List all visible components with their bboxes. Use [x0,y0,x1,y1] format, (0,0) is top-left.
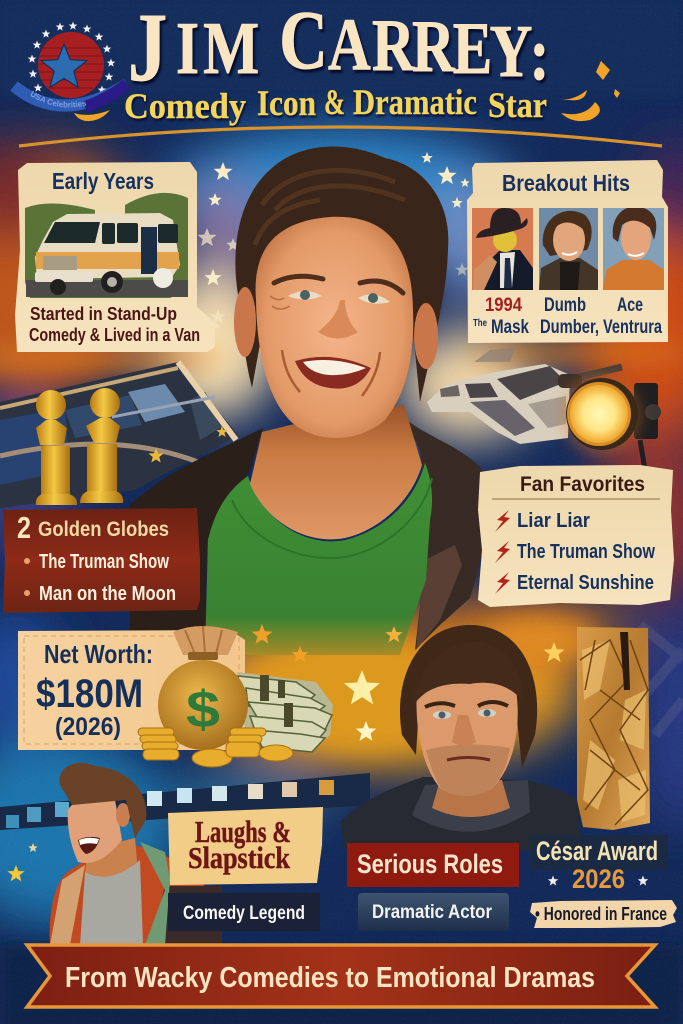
hair [400,625,537,768]
nose [452,715,476,746]
panel: golden globes: Golden Globes [38,518,169,541]
title arc [19,127,662,146]
mouth [282,350,380,396]
panel: early years [15,162,220,352]
panel: golden globes [3,508,200,613]
award year: 2026 [572,864,625,894]
net worth figures: (2026) [55,713,121,741]
award films: The Truman Show [39,551,169,573]
subtitle: Dramatic [353,82,477,122]
portrait: dramatic character [340,625,582,850]
title: M [203,8,259,90]
label: serious roles [347,843,519,887]
floral shirt [50,840,205,945]
film labels: Ace [617,295,643,316]
van illustration [25,193,188,298]
neck [250,405,422,539]
award films: Man on the Moon [39,583,176,605]
subtitle: Star [488,85,547,125]
filmstrip backdrop [0,362,238,508]
title: R [412,6,455,88]
film labels: Ventrura [603,317,662,338]
film labels: Dumb [544,295,586,316]
main portrait: smiling Jim Carrey [130,147,488,655]
film labels: The [473,318,487,329]
césar award block [530,835,677,928]
green shirt [205,463,432,655]
hair [235,147,448,402]
panel: laughs and slapstick: Slapstick [188,840,291,875]
film labels [473,295,662,338]
ears [234,287,438,369]
photo: ace ventura [603,206,664,290]
statuette 2 [80,388,123,503]
banner [27,945,655,1007]
subtitle: Icon [257,83,316,123]
favourites list: Liar Liar [517,510,590,532]
title: E [453,8,492,90]
face [256,217,413,438]
icon: money bag [158,626,248,750]
award count: 2 [17,510,31,545]
portrait: comedy character [50,763,222,945]
label: comedy legend: Comedy Legend [183,903,305,924]
eyes [288,290,390,304]
label: comedy legend [168,893,320,931]
icon: money stack [237,672,333,752]
photo: the mask [472,208,533,290]
film labels: Dumber, [540,317,599,338]
award films [24,551,176,605]
title sparkles [74,61,620,121]
subtitle: Comedy [124,86,246,126]
neck [85,838,137,877]
face [416,668,518,796]
label: dramatic actor [358,893,509,931]
label: dramatic actor: Dramatic Actor [372,902,493,923]
net worth figures [36,639,153,741]
hair highlights [255,170,405,245]
face [68,799,122,863]
jacket [340,777,582,850]
statuette 1 [36,390,77,505]
eye wrinkles [270,296,290,309]
honored in france tag [530,900,677,928]
favourites list: Eternal Sunshine [517,572,654,594]
panel: breakout hits [467,160,668,343]
golden globe statuettes [36,388,123,505]
subtitle [124,82,547,126]
brows [425,702,508,707]
vehicle: time car [427,348,570,444]
subtitle: & [324,82,345,122]
title: : [530,14,549,96]
heading: Fan Favorites [520,473,645,496]
net worth figures: Net Worth: [44,639,153,669]
tee [412,780,530,832]
césar statuette [577,627,650,830]
caption: Started in Stand-Up [30,304,177,324]
heading: Breakout Hits [502,170,630,196]
pompadour hair [60,763,146,838]
stubble [426,744,510,796]
decorative stars [198,152,470,323]
laugh [78,837,100,854]
eyes [433,709,496,719]
panel: laughs and slapstick: Laughs & [195,814,291,849]
logo: USA Celebrities: USA Celebrities [30,91,86,108]
icon: money bag: $ [186,681,220,739]
logo: USA Celebrities [10,22,131,112]
title: A [328,4,371,86]
title: R [372,5,415,87]
caption: Comedy & Lived in a Van [29,325,200,345]
label: serious roles: Serious Roles [357,849,503,879]
film labels: Mask [491,317,529,338]
banner: From Wacky Comedies to Emotional Dramas [65,962,595,994]
caption [29,304,200,345]
sparkle stars [7,624,564,881]
jacket [130,417,488,650]
icon: gold coins [138,728,293,767]
panel: laughs and slapstick [168,807,323,885]
spotlight [558,367,661,470]
net worth figures: $180M [36,672,143,716]
film labels: 1994 [485,295,522,316]
eyebrows [274,276,403,293]
mouth [447,758,490,760]
panel: net worth [18,630,245,750]
fringe [414,642,522,705]
ear [116,803,130,827]
heading: Early Years [52,168,154,194]
neck [432,780,510,817]
nose [318,300,358,338]
title [128,0,549,102]
title: I [176,8,199,90]
grey tee [80,860,143,945]
shirt collar [232,478,432,558]
panel: fan favorites [478,465,674,607]
photo: dumb and dumber [539,208,598,290]
favourites list [495,510,655,594]
title: Y [490,11,532,93]
film strip [0,773,370,830]
